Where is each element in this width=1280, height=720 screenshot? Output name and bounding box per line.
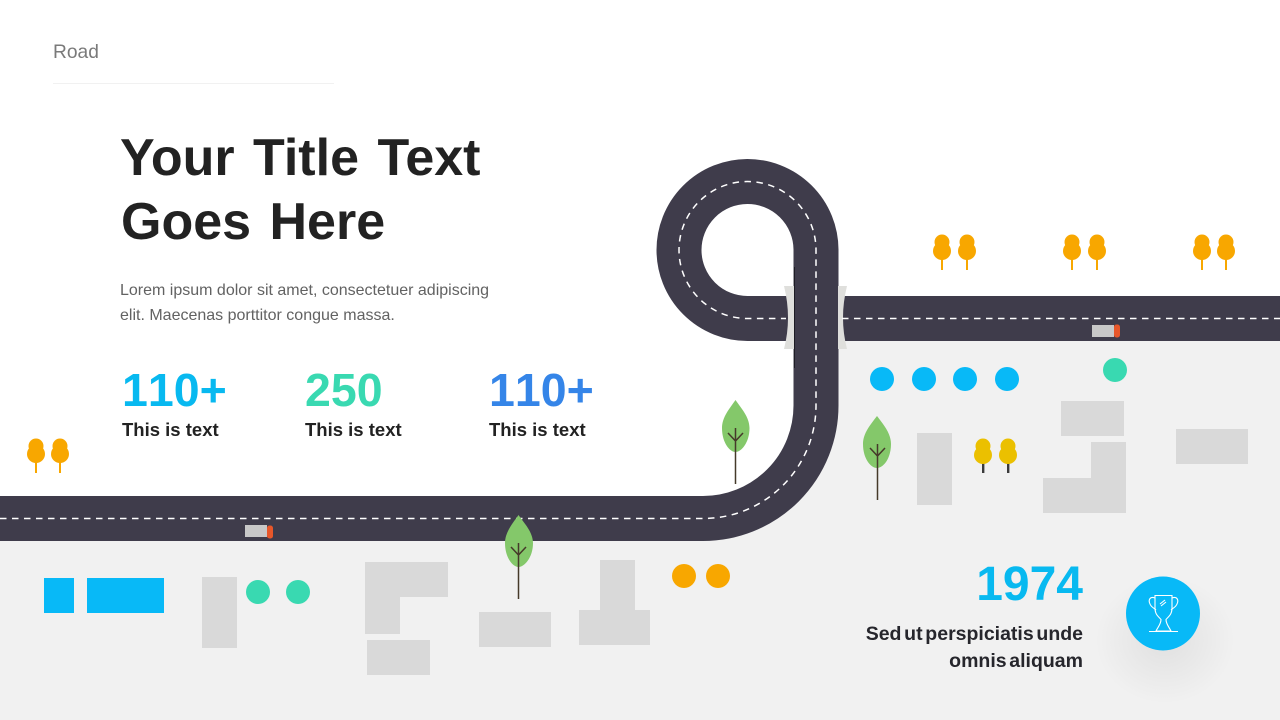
stat 1 bbox=[122, 364, 227, 440]
icon: trophy bbox=[1149, 596, 1178, 632]
title: Goes Here bbox=[121, 193, 385, 251]
leaf tree 2 bbox=[863, 416, 891, 500]
body text bbox=[120, 282, 489, 324]
callout text: omnis aliquam bbox=[949, 650, 1083, 672]
body text: elit. Maecenas porttitor congue massa. bbox=[120, 307, 395, 324]
ground area bbox=[0, 318, 1280, 720]
stat 3 label: This is text bbox=[489, 419, 586, 440]
section label: Road bbox=[53, 42, 99, 63]
header divider bbox=[53, 82, 334, 84]
truck on lower road bbox=[245, 525, 273, 538]
blue blocks bbox=[44, 578, 164, 613]
title: Your Title Text bbox=[120, 129, 480, 187]
leaf tree 3 bbox=[505, 515, 533, 599]
callout text bbox=[866, 623, 1083, 672]
round bushes bbox=[246, 358, 1127, 604]
orange trees bbox=[27, 234, 1235, 473]
trophy badge bbox=[1095, 576, 1235, 704]
leaf tree 1 bbox=[722, 400, 750, 484]
buildings bbox=[202, 401, 1248, 675]
yellow trees bbox=[974, 438, 1017, 473]
truck on upper road bbox=[1092, 324, 1120, 338]
road: loop and horizontal sections bbox=[0, 182, 1280, 518]
stat 1 label: This is text bbox=[122, 419, 219, 440]
year: 1974 bbox=[976, 558, 1083, 611]
stat 1 value: 110+ bbox=[122, 364, 227, 416]
stat 2 value: 250 bbox=[305, 364, 383, 416]
stat 2 label: This is text bbox=[305, 419, 402, 440]
stat 3 bbox=[489, 364, 594, 440]
callout text: Sed ut perspiciatis unde bbox=[866, 623, 1083, 645]
bridge supports bbox=[784, 286, 847, 349]
body text: Lorem ipsum dolor sit amet, consectetuer adipiscing bbox=[120, 282, 489, 299]
stat 2 bbox=[305, 364, 402, 440]
road centre markings bbox=[0, 182, 1280, 518]
title bbox=[120, 129, 480, 251]
stat 3 value: 110+ bbox=[489, 364, 594, 416]
year callout bbox=[866, 558, 1083, 672]
